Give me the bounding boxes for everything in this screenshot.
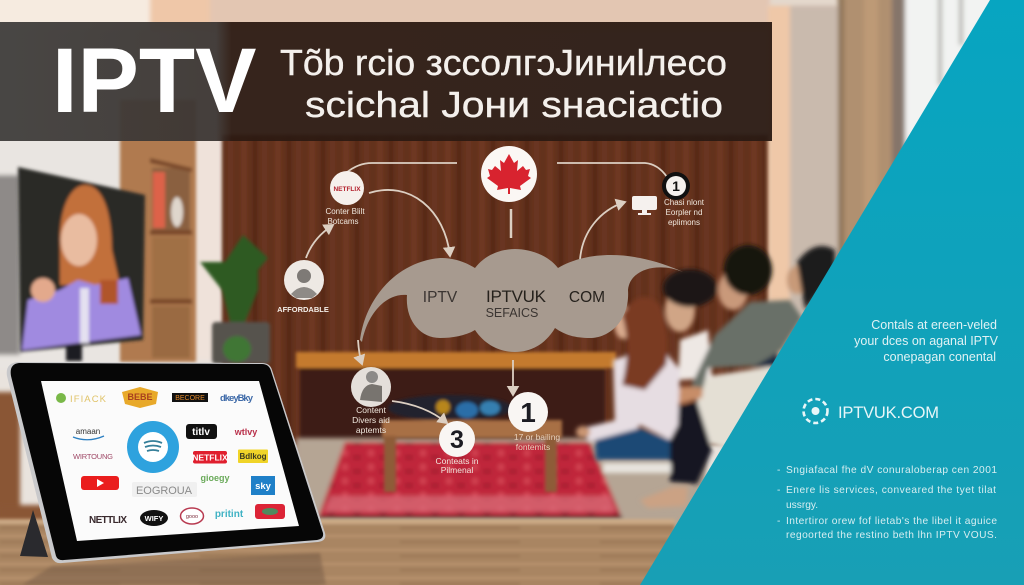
cloud: IPTVUK services bbox=[360, 249, 683, 352]
man in grey bbox=[640, 269, 802, 508]
logo: black badge bbox=[172, 393, 208, 402]
cloud label: Sefaics: SEFAICS bbox=[486, 306, 538, 320]
logo: Wirtoung: WIRTOUNG bbox=[73, 452, 113, 461]
logo: yellow badge bbox=[238, 450, 268, 463]
man at back bbox=[718, 245, 772, 310]
logo: red rounded badge bbox=[255, 504, 285, 519]
logo: sky bbox=[251, 476, 275, 495]
panel bullet list: Intertiror orew fof lietab's the libel it aguice bbox=[786, 516, 997, 527]
logo: Ifiack: IFIACK bbox=[70, 394, 107, 405]
diagram connectors bbox=[306, 163, 667, 423]
white sofa bbox=[697, 367, 790, 450]
label bbox=[514, 432, 560, 452]
logo: black badge: BECORE bbox=[175, 395, 205, 402]
logo: Nettlix: NETTLIX bbox=[89, 515, 127, 526]
panel logo icon bbox=[804, 399, 828, 423]
logo: Bebe bbox=[122, 387, 158, 408]
coffee table bbox=[382, 395, 562, 492]
wood tabletop bbox=[0, 519, 675, 585]
blue top behind bbox=[752, 350, 778, 367]
label: Pilmenal bbox=[441, 465, 473, 475]
logo: Ifiack bbox=[56, 393, 107, 405]
panel intro text: your dces on aganal IPTV bbox=[854, 334, 999, 348]
cloud label: IPTVUK: IPTVUK bbox=[486, 287, 547, 306]
node: number one bbox=[508, 392, 560, 452]
node: person / affordable bbox=[277, 260, 329, 314]
label: Botcams bbox=[327, 217, 359, 226]
wood panel wall bbox=[222, 135, 770, 445]
left wall bbox=[0, 130, 305, 527]
brand: IPTVUK.COM: IPTVUK.COM bbox=[838, 404, 939, 422]
node: Netflix bbox=[325, 171, 365, 226]
icon: monitor bbox=[632, 196, 657, 215]
node: Netflix: NETFLIX bbox=[333, 186, 361, 193]
logo: amazon: amaan bbox=[76, 427, 100, 436]
node: number three bbox=[436, 421, 479, 475]
label: aptemts bbox=[356, 425, 386, 435]
logo: red Netflix: NETFLIX bbox=[192, 452, 228, 462]
logo: Gioegy: gioegy bbox=[200, 473, 230, 483]
logo: titlv: titlv bbox=[192, 427, 210, 438]
logo: titlv bbox=[186, 424, 217, 439]
panel bullet list: ussrgy. bbox=[786, 500, 818, 511]
logo: red ring bbox=[180, 508, 204, 524]
label bbox=[352, 405, 390, 435]
panel intro text bbox=[854, 318, 999, 364]
tablet screen bbox=[41, 381, 299, 541]
panel bullet list: - bbox=[777, 465, 780, 476]
title: IPTV: IPTV bbox=[52, 30, 256, 132]
television bbox=[18, 167, 145, 361]
cloud label: IPTV: IPTV bbox=[423, 289, 458, 306]
logo: red script: wtlvy bbox=[234, 427, 257, 437]
node: number one with monitor bbox=[632, 172, 705, 227]
panel intro text: conepagan conental bbox=[883, 350, 996, 364]
logo: Wify oval bbox=[140, 510, 168, 526]
subtitle: scichal Joни sнaciactio bbox=[305, 84, 723, 125]
logo: amazon bbox=[73, 427, 104, 440]
people on the sofa bbox=[576, 245, 835, 508]
title band bbox=[0, 22, 772, 141]
label: AFFORDABLE bbox=[277, 305, 329, 314]
logo: Eogroua bbox=[132, 482, 197, 497]
tablet with streaming logos bbox=[7, 362, 325, 563]
ceiling bbox=[0, 0, 910, 30]
label: Conteats in bbox=[436, 456, 479, 466]
label bbox=[436, 456, 479, 475]
label: Conter Blilt bbox=[325, 207, 365, 216]
panel bullet list bbox=[777, 465, 997, 541]
panel bullet list: Enere lis services, conveared the tyet tilat bbox=[786, 485, 996, 496]
logo: sky: sky bbox=[255, 481, 272, 492]
label bbox=[325, 207, 365, 226]
label: Chasi nlont bbox=[664, 198, 705, 207]
panel bullet list: regoorted the restino beth lhn IPTV VOUS. bbox=[786, 530, 997, 541]
tablet reflection bbox=[22, 553, 326, 585]
right wall, curtain and window bbox=[768, 0, 995, 366]
node: number three: 3 bbox=[450, 426, 464, 454]
panel bullet list: Sngiafacal fhe dV conuraloberap cen 2001 bbox=[786, 465, 997, 476]
node: content person bbox=[351, 367, 391, 435]
node: number one with monitor: 1 bbox=[672, 178, 680, 194]
shelf bbox=[120, 100, 196, 362]
panel bullet list: - bbox=[777, 485, 780, 496]
logo: Wify oval: WIFY bbox=[145, 514, 163, 523]
tablet body bbox=[7, 362, 325, 563]
label: eplimons bbox=[668, 218, 700, 227]
logo: Eogroua: EOGROUA bbox=[136, 485, 193, 497]
panel intro text: Contals at ereen-veled bbox=[871, 318, 997, 332]
label: 17 or bailing bbox=[514, 432, 560, 442]
panel bullet list: - bbox=[777, 516, 780, 527]
subtitle: Tõb rcio зccoлгɔJиниlлeco bbox=[280, 42, 727, 83]
label: Content bbox=[356, 405, 387, 415]
logo: music circle bbox=[127, 421, 179, 473]
label bbox=[664, 198, 705, 227]
logo: YouTube bbox=[81, 476, 119, 490]
logo: red ring: gooo bbox=[186, 514, 198, 520]
label: Divers aid bbox=[352, 415, 390, 425]
woman with red hair bbox=[576, 297, 680, 473]
teal panel bbox=[640, 0, 1024, 585]
floor bbox=[0, 438, 706, 528]
logo: yellow badge: Bdlkog bbox=[239, 452, 267, 461]
console bbox=[296, 352, 616, 444]
logo: Pritint: pritint bbox=[215, 509, 244, 520]
kickstand bbox=[20, 510, 48, 557]
subtitle bbox=[280, 42, 727, 125]
cloud label: COM: COM bbox=[569, 289, 605, 306]
logo: Bebe: BEBE bbox=[127, 392, 153, 402]
plant bbox=[200, 235, 270, 364]
node: Canada maple leaf bbox=[481, 146, 537, 202]
label: fontemits bbox=[516, 442, 550, 452]
right woman bbox=[787, 246, 835, 310]
node: number one: 1 bbox=[520, 397, 536, 428]
logo: dkeyBky: dkeyBky bbox=[220, 393, 254, 404]
label: Eorpler nd bbox=[666, 208, 702, 217]
